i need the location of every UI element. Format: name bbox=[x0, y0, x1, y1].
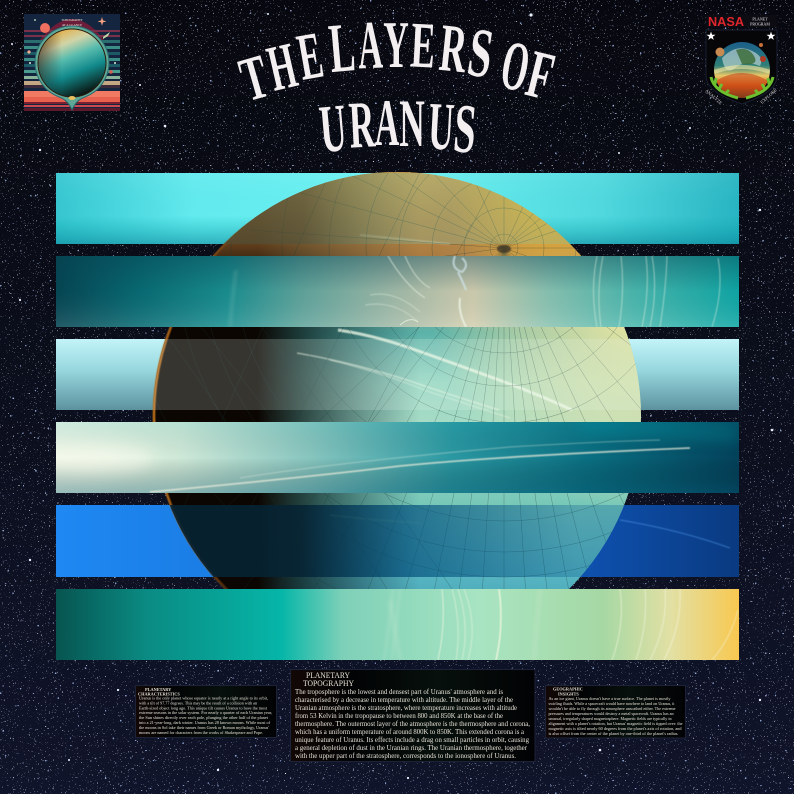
logo: NASA planet program badge: PROGRAM bbox=[750, 22, 770, 26]
title: The Layers of Uranus: F bbox=[519, 36, 561, 115]
logo: topography poster: AT A GLANCE bbox=[62, 23, 82, 27]
title: The Layers of Uranus: A bbox=[357, 7, 384, 84]
band 4: opaque layer with diagonal cloud streaks bbox=[35, 422, 739, 493]
logo: NASA planet program badge bbox=[704, 14, 778, 106]
text block: planetary topography: with the upper part of the stratosphere, corresponds to the ionosphere of Uranus. bbox=[295, 751, 516, 760]
band 6: opaque layer with vertical pale streaks bbox=[56, 589, 739, 660]
text block: geographic insights: pressures and temperatures would destroy a metal spacecraft. Uranus has an bbox=[548, 711, 674, 716]
logo planet bbox=[38, 30, 106, 96]
heading: planetary topography: PLANETARY bbox=[306, 671, 350, 680]
text block: planetary characteristics: the moons in Sol take their names from Greek or Roman mythology, Uranus' bbox=[139, 725, 269, 731]
title: The Layers of Uranus: O bbox=[495, 25, 536, 107]
text block: geographic insights: swirling fluids. While a spacecraft would have nowhere to land on Uranus, it bbox=[548, 701, 675, 707]
pole vortex bbox=[497, 245, 511, 253]
title: The Layers of Uranus: E bbox=[292, 17, 328, 95]
title: The Layers of Uranus: E bbox=[409, 10, 437, 82]
text block: geographic insights: magnetic axis is tilted nearly 60 degrees from the planet's axis of rotation, and bbox=[548, 726, 682, 732]
text block: planetary characteristics: Uranus is the only planet whose equator is nearly at a right angle to its orbit, bbox=[139, 696, 268, 702]
text block: planetary characteristics: the Sun shines directly over each pole, plunging the other half of the planet bbox=[139, 715, 269, 721]
band 1 tint over planet bbox=[224, 173, 570, 244]
heading: geographic insights: INSIGHTS bbox=[558, 692, 579, 696]
heading: geographic insights bbox=[553, 686, 583, 696]
title: The Layers of Uranus: Y bbox=[383, 7, 409, 82]
text block: planetary characteristics bbox=[139, 696, 272, 735]
panel: planetary topography bbox=[290, 670, 535, 762]
cloud streaks bbox=[296, 234, 572, 418]
title: The Layers of Uranus: H bbox=[261, 30, 303, 106]
title: The Layers of Uranus: U bbox=[316, 89, 350, 167]
logo: NASA planet program badge: PLANET bbox=[752, 16, 768, 22]
logo: NASA planet program badge: EXPLORE bbox=[759, 87, 778, 105]
text block: planetary characteristics: moons are named for characters from the works of Shakespeare and Pope. bbox=[139, 730, 263, 735]
title: The Layers of Uranus: N bbox=[399, 86, 425, 161]
title: The Layers of Uranus: T bbox=[233, 42, 276, 115]
band 3 tint over planet bbox=[153, 339, 641, 410]
band 5: blue atmosphere backdrop bbox=[56, 505, 739, 577]
logo: NASA planet program badge: NASA bbox=[708, 14, 745, 29]
logo: topography poster: TOPOGRAPHY bbox=[61, 18, 83, 22]
text block: planetary topography: Uranian atmosphere is the stratosphere, where temperature increases with altitude bbox=[295, 703, 517, 712]
heading: planetary topography: TOPOGRAPHY bbox=[303, 679, 354, 688]
text block: geographic insights: wouldn't be able to fly through its atmosphere unscathed either. The extreme bbox=[548, 706, 676, 711]
title: The Layers of Uranus: S bbox=[463, 12, 498, 93]
text block: planetary topography bbox=[295, 687, 530, 760]
panel: geographic insights bbox=[546, 686, 686, 738]
text block: planetary topography: thermosphere. The outermost layer of the atmosphere is the thermosphere and corona, bbox=[295, 719, 530, 728]
text block: planetary characteristics: Earth-sized object long ago. This unique tilt causes Uranus to have the most bbox=[139, 705, 268, 710]
band 5 tint over planet bbox=[170, 505, 624, 577]
text block: planetary characteristics: with a tilt of 97.77 degrees. This may be the result of a collision with an bbox=[139, 700, 258, 705]
planet Uranus with latitude and longitude grid bbox=[152, 172, 641, 589]
band 1: upper atmosphere backdrop bbox=[56, 173, 739, 244]
logo: NASA planet program badge: ANALYZE bbox=[704, 88, 723, 106]
text block: planetary topography: which has a uniform temperature of around 800K to 850K. This extended corona is a bbox=[295, 727, 524, 736]
band 3: pale atmosphere backdrop bbox=[56, 339, 739, 410]
text block: geographic insights: As an ice giant, Uranus doesn't have a true surface. The planet is mostly bbox=[548, 696, 671, 702]
title: The Layers of Uranus: R bbox=[347, 86, 377, 163]
text block: planetary characteristics: into a 21-year-long, dark winter. Uranus has 28 known moons. While most of bbox=[139, 720, 271, 726]
band 2: opaque layer with white swirls bbox=[56, 256, 739, 327]
text block: geographic insights: unusual, irregularly shaped magnetosphere. Magnetic fields are typically in bbox=[548, 716, 672, 722]
text block: planetary topography: from 53 Kelvin in the tropopause to between 800 and 850K at the base of the bbox=[295, 711, 503, 720]
title: The Layers of Uranus: U bbox=[426, 88, 456, 165]
text block: planetary characteristics: extreme seasons in the solar system. For nearly a quarter of each Uranian year, bbox=[139, 710, 272, 716]
title: The Layers of Uranus: A bbox=[375, 87, 399, 160]
grid lines: parallels bbox=[156, 172, 636, 589]
text block: geographic insights: alignment with a planet's rotation, but Uranus' magnetic field is tipped over: the bbox=[548, 721, 683, 727]
heading: planetary characteristics: PLANETARY bbox=[145, 687, 172, 692]
text block: planetary topography: characterised by a decrease in temperature with altitude. The middle layer of the bbox=[295, 695, 513, 704]
title: The Layers of Uranus: S bbox=[451, 90, 479, 169]
logo: topography poster bbox=[24, 14, 120, 111]
heading: geographic insights: GEOGRAPHIC bbox=[553, 686, 583, 692]
title: The Layers of Uranus bbox=[233, 7, 561, 169]
heading: planetary characteristics: CHARACTERISTICS bbox=[138, 692, 180, 696]
grid lines: meridians bbox=[229, 172, 641, 589]
title: The Layers of Uranus: L bbox=[326, 9, 358, 88]
text block: planetary topography: unique feature of Uranus. Its effects include a drag on small particles in orbit, causing bbox=[295, 735, 529, 744]
text block: planetary topography: a general depletion of dust in the Uranian rings. The Uranian thermosphere, together bbox=[295, 743, 527, 752]
heading: planetary topography bbox=[303, 671, 354, 688]
panel: planetary characteristics bbox=[136, 686, 276, 738]
text block: geographic insights: is also offset from the center of the planet by one-third of the planet's radius. bbox=[548, 731, 678, 736]
title: The Layers of Uranus: R bbox=[436, 9, 471, 87]
heading: planetary characteristics bbox=[138, 687, 180, 696]
text block: geographic insights bbox=[548, 696, 683, 736]
text block: planetary topography: The troposphere is the lowest and densest part of Uranus' atmosphere and is bbox=[295, 687, 503, 696]
